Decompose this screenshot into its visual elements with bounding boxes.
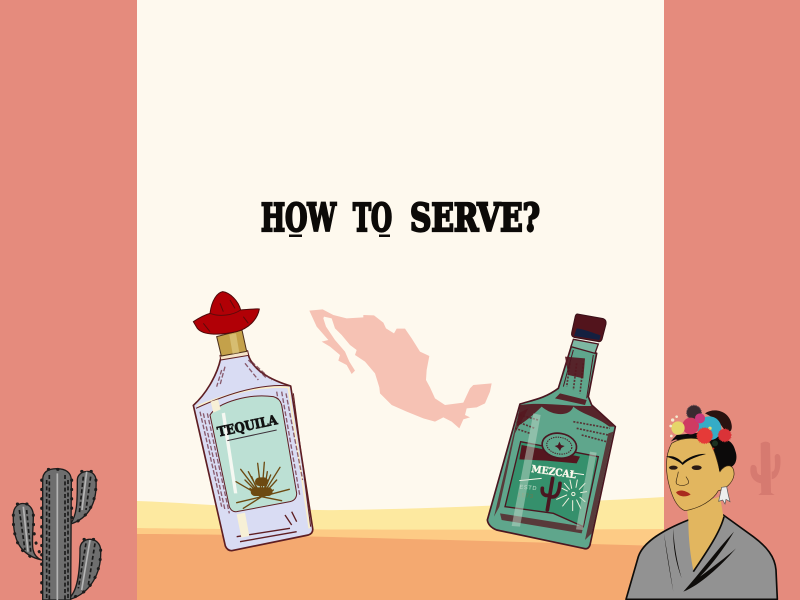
title: SERVE? (410, 195, 540, 240)
figure: woman with flowers (626, 405, 777, 599)
cactus: left grey (13, 469, 101, 600)
bottle glass (193, 354, 313, 551)
gold cap (217, 330, 247, 356)
red hat (193, 292, 259, 334)
nose (676, 472, 689, 485)
title (261, 195, 540, 240)
cream stripes (211, 399, 249, 538)
neck shading (563, 350, 593, 398)
icon: label cactus (542, 478, 560, 510)
shawl (626, 515, 777, 599)
collar (571, 339, 598, 353)
eyebrows (666, 454, 706, 465)
cactus ribs (19, 475, 95, 600)
glass highlights (512, 413, 597, 530)
eyes (669, 466, 678, 470)
label text: MEZCAL (531, 464, 577, 481)
icon: sun rays (557, 480, 587, 511)
icon: agave (236, 462, 289, 508)
shawl folds (664, 528, 736, 592)
desert ground bands (137, 497, 664, 600)
label highlight (222, 413, 237, 493)
label panel (505, 442, 598, 527)
lips (676, 490, 691, 496)
cactus arms and trunk (13, 469, 101, 600)
bottle shading (517, 357, 615, 427)
mezcal bottle (487, 314, 615, 549)
dark cap (572, 314, 606, 342)
map of Mexico (309, 309, 492, 428)
label (210, 396, 297, 512)
flowers (669, 405, 731, 450)
tequila bottle (193, 292, 313, 551)
neck collar (220, 351, 249, 360)
panel: cream centre (137, 0, 664, 600)
mezcal bottle: ESTD (519, 485, 537, 492)
neck (687, 497, 724, 571)
inner cream edge (197, 387, 309, 528)
cactus: right small (750, 442, 781, 495)
label text: TEQUILA (216, 412, 279, 441)
cactus spines (13, 469, 101, 600)
hair back (673, 434, 736, 472)
glass shading (200, 360, 303, 513)
mezcal bottle: 1573 (517, 493, 534, 500)
face (666, 438, 734, 511)
earring (719, 487, 730, 504)
bottle glass (487, 345, 615, 549)
title: HOW (261, 195, 336, 240)
title: TO (353, 195, 392, 240)
hatching (515, 363, 610, 442)
label seal (540, 431, 579, 461)
hair bun (705, 410, 732, 432)
hair front (671, 432, 736, 472)
